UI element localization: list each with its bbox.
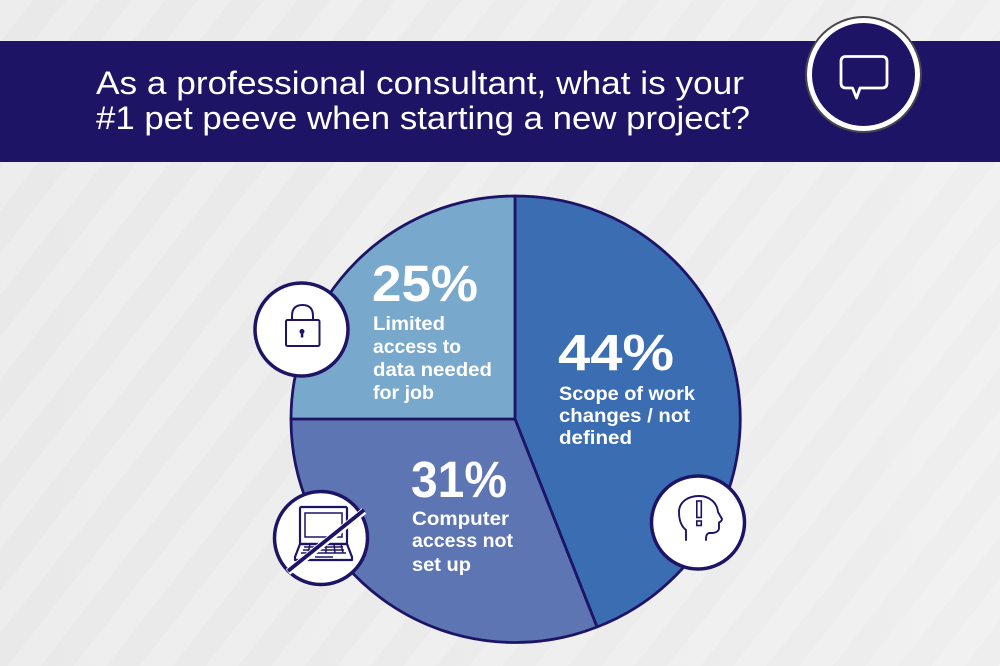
slice: 44% scope of work: changes / not [559,405,691,427]
icon: crossed-out laptop badge [274,492,368,584]
slice: 25% limited access [291,196,515,419]
label: limited access text: Limited [373,313,445,335]
label: 25%: 25% [372,255,478,312]
label: 31%: 31% [411,451,507,508]
label: 44%: 44% [558,324,674,381]
icon: padlock badge [255,283,348,376]
icon: speech bubble badge [806,17,921,132]
label: scope of work text: Scope of work [559,383,695,405]
slice: 44% scope of work [515,196,740,627]
slice: 31% computer access: access not [412,530,513,552]
pie chart [291,196,740,642]
slice: 25% limited access: access to [373,336,461,358]
icon: head with exclamation badge [652,476,744,569]
slice: 25% limited access: data needed [373,359,492,381]
slice: 31% computer access: set up [412,554,471,576]
title: As a professional consultant, what is your [96,65,744,101]
slice: 25% limited access: for job [373,382,434,404]
slice: 31% computer access [291,419,597,642]
slice: 44% scope of work: defined [559,427,632,449]
header band [0,41,1000,162]
label: computer access text: Computer [412,508,509,530]
header band: #1 pet peeve when starting a new project? [96,100,750,136]
